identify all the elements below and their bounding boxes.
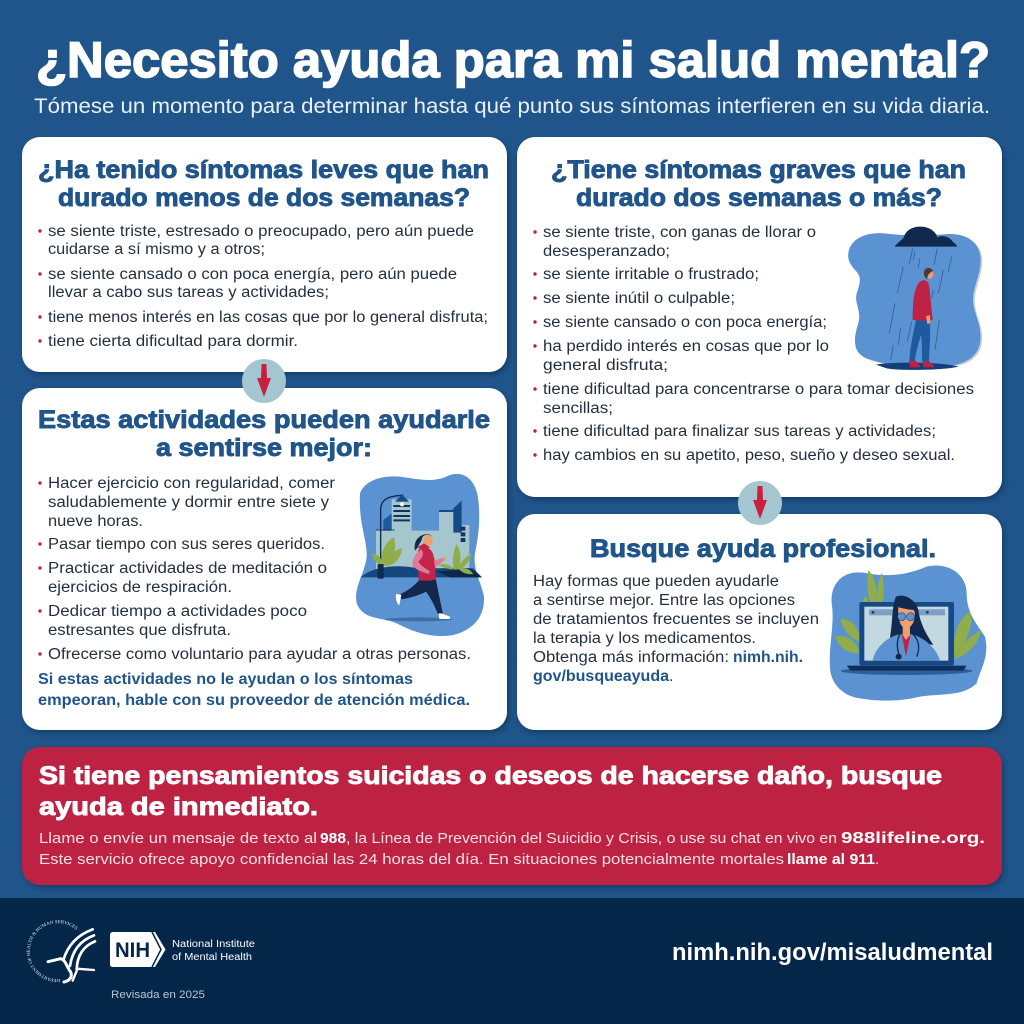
list: activities: Pasar tiempo con sus seres queridos. [48, 536, 325, 553]
heading: helpful activities [38, 406, 490, 462]
logo: HHS seal: DEPARTMENT OF HEALTH & HUMAN SERVICES · USA [26, 920, 80, 982]
list: severe symptoms: se siente cansado o con poca energía; [543, 314, 827, 331]
logo: NIH National Institute of Mental Health: of Mental Health [172, 952, 252, 963]
heading: helpful activities: a sentirse mejor: [156, 434, 372, 462]
callout: see a provider [38, 671, 470, 709]
text: treatment options: a sentirse mejor. Entre las opciones [533, 592, 795, 609]
logo: NIH National Institute of Mental Health: NIH [115, 939, 150, 962]
callout: see a provider: Si estas actividades no le ayudan o los síntomas [38, 671, 413, 688]
list: mild symptoms: se siente cansado o con poca energía, pero aún puede [48, 266, 457, 283]
list: severe symptoms [533, 224, 974, 464]
list: mild symptoms: tiene menos interés en las cosas que por lo general disfruta; [48, 309, 488, 326]
logo: HHS seal [26, 920, 96, 984]
heading: severe symptoms [551, 156, 966, 212]
text: crisis resources: 988lifeline.org. [841, 830, 985, 847]
text: treatment options: . [669, 668, 673, 685]
website url: nimh.nih.gov/misaludmental [672, 939, 993, 966]
list: mild symptoms: se siente triste, estresado o preocupado, pero aún puede [48, 223, 474, 240]
text: treatment options: Hay formas que pueden ayudarle [533, 573, 779, 590]
icon: doctor on a laptop [830, 566, 986, 701]
list: activities: nueve horas. [48, 513, 143, 530]
text: crisis resources: Llame o envíe un mensaje de texto al [39, 830, 317, 847]
list: mild symptoms: llevar a cabo sus tareas y actividades; [48, 284, 329, 301]
subtitle: Tómese un momento para determinar hasta qué punto sus síntomas interfieren en su vida diaria. [34, 95, 990, 118]
text: crisis resources: , la Línea de Prevención del Suicidio y Crisis, o use su chat en vivo en [346, 830, 837, 847]
panel: mild symptoms [22, 137, 507, 372]
list: activities: Practicar actividades de meditación o [48, 560, 327, 577]
list: severe symptoms: general disfruta; [543, 357, 668, 374]
list: severe symptoms: tiene dificultad para finalizar sus tareas y actividades; [543, 423, 936, 440]
panel: seek professional help [517, 514, 1002, 730]
text: treatment options: Obtenga más información: [533, 649, 729, 666]
list: severe symptoms: se siente inútil o culpable; [543, 290, 735, 307]
heading: severe symptoms: durado dos semanas o más? [576, 184, 942, 212]
list: activities: estresantes que disfruta. [48, 622, 231, 639]
text: treatment options [533, 573, 819, 685]
text: treatment options: la terapia y los medicamentos. [533, 630, 756, 647]
icon: woman running in the city [356, 474, 484, 636]
list: mild symptoms [38, 223, 488, 350]
heading: mild symptoms: durado menos de dos semanas? [58, 184, 470, 212]
text: crisis resources: 988 [320, 830, 346, 847]
logo: NIH National Institute of Mental Health: National Institute [172, 939, 255, 950]
revision date: Revisada en 2025 [111, 989, 205, 1001]
heading: crisis warning: ayuda de inmediato. [39, 793, 318, 821]
list: activities: saludablemente y dormir entre siete y [48, 494, 329, 511]
arrow: severe symptoms to professional help [738, 481, 782, 525]
heading: severe symptoms: ¿Tiene síntomas graves que han [551, 156, 966, 184]
heading: seek help: Busque ayuda profesional. [590, 535, 936, 563]
logo: NIH National Institute of Mental Health [110, 932, 255, 967]
panel: helpful activities [22, 388, 507, 730]
text: crisis resources: . [875, 851, 879, 868]
text: treatment options: de tratamientos frecuentes se incluyen [533, 611, 819, 628]
list: activities: Hacer ejercicio con regularidad, comer [48, 475, 335, 492]
list: activities: ejercicios de respiración. [48, 579, 232, 596]
heading: crisis warning [39, 762, 942, 821]
list: severe symptoms: sencillas; [543, 400, 613, 417]
icon: man under a rain cloud [848, 227, 982, 370]
heading: mild symptoms: ¿Ha tenido síntomas leves que han [38, 156, 489, 184]
list: activities [38, 475, 471, 663]
list: severe symptoms: desesperanzado; [543, 243, 670, 260]
text: crisis resources: Este servicio ofrece apoyo confidencial las 24 horas del día. En situaciones potencialmente mortales [39, 851, 784, 868]
text: treatment options: gov/busqueayuda [533, 668, 669, 685]
text: crisis resources [39, 830, 985, 868]
heading: crisis warning: Si tiene pensamientos suicidas o deseos de hacerse daño, busque [39, 762, 942, 790]
panel: crisis warning [22, 747, 1002, 885]
title: ¿Necesito ayuda para mi salud mental? [36, 32, 990, 88]
list: mild symptoms: tiene cierta dificultad para dormir. [48, 333, 298, 350]
list: severe symptoms: se siente triste, con ganas de llorar o [543, 224, 816, 241]
list: severe symptoms: hay cambios en su apetito, peso, sueño y deseo sexual. [543, 447, 955, 464]
text: crisis resources: llame al 911 [787, 851, 875, 868]
list: activities: Ofrecerse como voluntario para ayudar a otras personas. [48, 646, 471, 663]
heading: helpful activities: Estas actividades pueden ayudarle [38, 406, 490, 434]
list: severe symptoms: tiene dificultad para concentrarse o para tomar decisiones [543, 381, 974, 398]
list: mild symptoms: cuidarse a sí mismo y a otros; [48, 241, 265, 258]
text: treatment options: nimh.nih. [733, 649, 803, 666]
heading: mild symptoms [38, 156, 489, 212]
arrow: mild symptoms to activities [242, 359, 286, 403]
list: severe symptoms: ha perdido interés en cosas que por lo [543, 338, 829, 355]
panel: severe symptoms [517, 137, 1002, 497]
list: severe symptoms: se siente irritable o frustrado; [543, 266, 759, 283]
list: activities: Dedicar tiempo a actividades poco [48, 603, 307, 620]
callout: see a provider: empeoran, hable con su proveedor de atención médica. [38, 692, 470, 709]
